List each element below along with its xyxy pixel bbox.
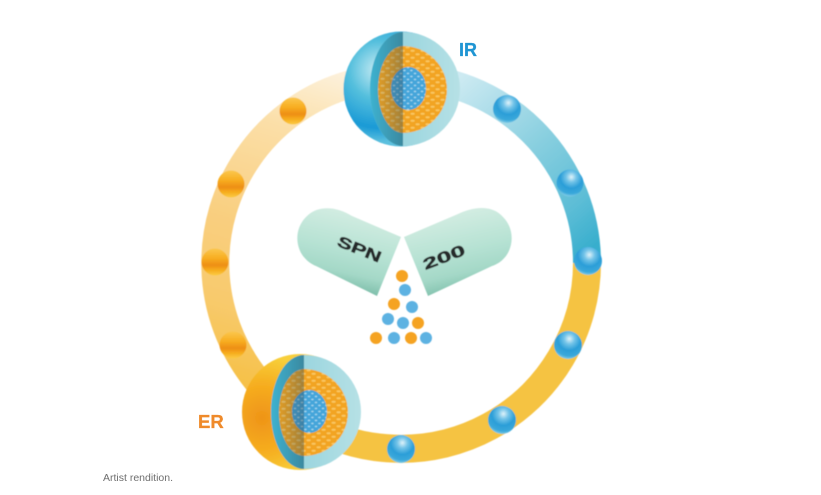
falling pellets: [370, 270, 432, 344]
ER sphere: [242, 354, 361, 470]
capsule: left half: [297, 208, 401, 296]
label: ER: ER: [198, 411, 224, 432]
ring: gold fading left segment: [215, 77, 401, 419]
IR sphere: [344, 32, 460, 146]
capsule: right half: 200: [421, 242, 468, 274]
capsule: right half: [404, 208, 512, 296]
ring beads: blue: [387, 95, 602, 463]
ring beads: orange: [202, 98, 306, 358]
ring: gold lower right segment: [300, 263, 587, 449]
ring: blue IR release segment: [401, 77, 587, 263]
capsule: left half: SPN: [335, 233, 384, 266]
caption: Artist rendition.: [103, 473, 173, 484]
label: IR: IR: [459, 40, 477, 60]
